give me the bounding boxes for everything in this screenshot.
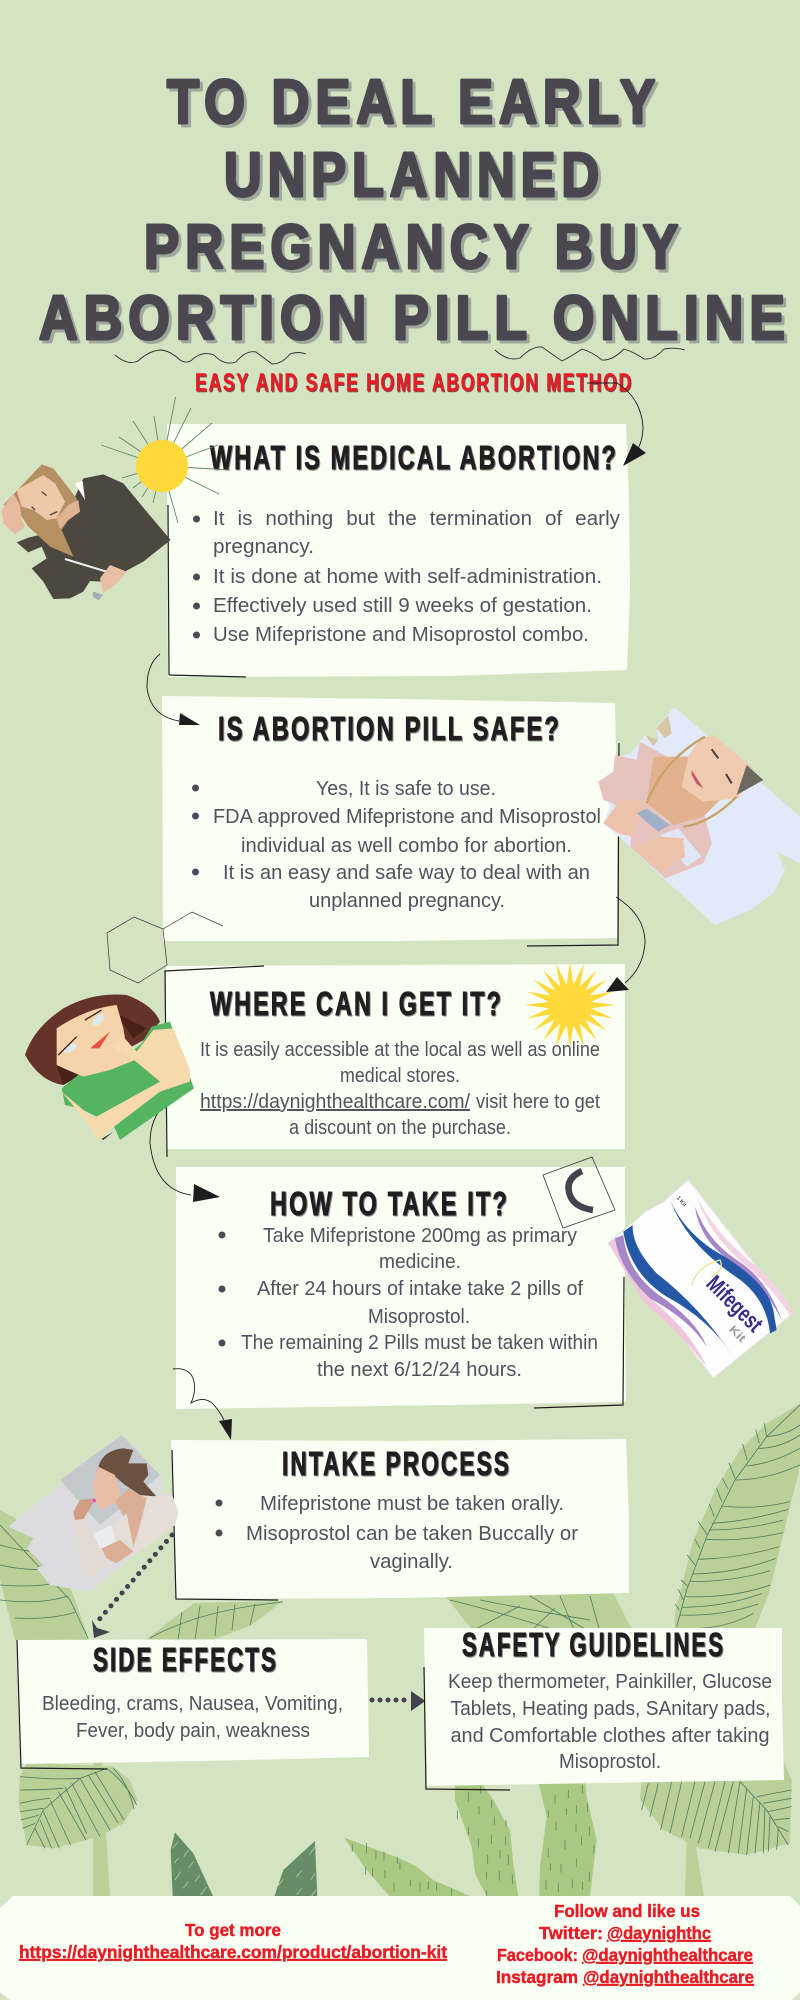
panel: what is medical abortion xyxy=(167,424,630,677)
decorative leaves: bottom dark green pair and mid leaf xyxy=(171,1832,472,1897)
title: UNPLANNED xyxy=(224,141,605,210)
subtitle: EASY AND SAFE HOME ABORTION METHOD xyxy=(195,369,633,397)
arrow: panel three to panel four xyxy=(150,1103,220,1202)
bullet list xyxy=(218,1225,598,1381)
footer: social links: Twitter: xyxy=(539,1923,603,1943)
decorative leaf: middle left xyxy=(145,1601,283,1640)
illustration: thinking cartoon woman xyxy=(25,994,194,1140)
body text: Fever, body pain, weakness xyxy=(76,1720,310,1742)
body text: and Comfortable clothes after taking xyxy=(450,1725,770,1747)
photo: Mifegest kit box: Mifegest xyxy=(701,1270,768,1337)
footer: social links xyxy=(496,1901,754,1987)
photo: woman with pill pack xyxy=(598,707,800,925)
bullet list xyxy=(216,1493,578,1573)
footer: social links: Instagram xyxy=(496,1967,578,1987)
bullet list: Misoprostol. xyxy=(368,1306,470,1328)
bullet list: It is done at home with self-administration. xyxy=(213,566,602,588)
footer: social links: @daynighthealthcare xyxy=(582,1945,753,1965)
body text: visit here to get xyxy=(476,1091,600,1113)
photo: Mifegest kit box xyxy=(608,1179,793,1378)
arrow: dotted to side effects xyxy=(92,1535,172,1638)
body text xyxy=(42,1693,343,1742)
heading: SIDE EFFECTS xyxy=(93,1641,278,1678)
decorative leaf: right tall xyxy=(675,1403,800,1633)
arrowhead over starburst xyxy=(606,977,629,992)
bullet list: the next 6/12/24 hours. xyxy=(317,1359,522,1381)
heading: HOW TO TAKE IT? xyxy=(270,1185,509,1222)
bullet list: Misoprostol can be taken Buccally or xyxy=(246,1523,578,1545)
bullet list: Yes, It is safe to use. xyxy=(316,778,496,800)
bullet list xyxy=(192,778,601,912)
heading: INTAKE PROCESS xyxy=(282,1445,511,1482)
icon: starburst xyxy=(525,962,615,1048)
bullet list: After 24 hours of intake take 2 pills of xyxy=(257,1278,583,1300)
heading: WHERE CAN I GET IT? xyxy=(210,985,503,1022)
footer: get more link: https://daynighthealthcare.com/product/abortion-kit xyxy=(19,1942,447,1962)
bullet list: The remaining 2 Pills must be taken within xyxy=(241,1332,598,1354)
bullet list xyxy=(193,508,620,646)
decorative plant: bottom left round leaf xyxy=(18,1760,137,1896)
body text: Tablets, Heating pads, SAnitary pads, xyxy=(450,1698,770,1720)
photo: Mifegest kit box: Kit xyxy=(726,1324,748,1345)
bullet list: FDA approved Mifepristone and Misoprostol xyxy=(213,806,601,828)
body text: medical stores. xyxy=(340,1065,460,1087)
body text: Keep thermometer, Painkiller, Glucose xyxy=(448,1671,772,1693)
body text: https://daynighthealthcare.com/ xyxy=(200,1091,470,1113)
footer: social links: @daynighthc xyxy=(607,1923,711,1943)
decorative hexagon line art xyxy=(107,912,223,983)
footer: get more link: To get more xyxy=(185,1920,281,1940)
decorative leaf: centre behind panels xyxy=(446,1590,633,1632)
arrow: panel one to panel two xyxy=(147,654,200,725)
bullet list: It is nothing but the termination of early xyxy=(213,508,620,530)
footer: get more link xyxy=(19,1920,447,1962)
bullet list: It is an easy and safe way to deal with an xyxy=(223,862,590,884)
bullet list: individual as well combo for abortion. xyxy=(241,835,572,857)
body text: It is easily accessible at the local as well as online xyxy=(200,1039,600,1061)
panel: how to take it xyxy=(176,1167,626,1409)
icon: sun with rays xyxy=(101,397,230,523)
bullet list: Mifepristone must be taken orally. xyxy=(260,1493,564,1515)
bullet list: medicine. xyxy=(379,1251,461,1273)
title: PREGNANCY BUY xyxy=(144,213,684,282)
title xyxy=(39,68,791,353)
title: TO DEAL EARLY xyxy=(167,68,661,137)
squiggle under title xyxy=(115,347,685,364)
bullet list: Use Mifepristone and Misoprostol combo. xyxy=(213,624,589,646)
decorative plant: stalks and right round leaf xyxy=(455,1760,792,1897)
arrow: dotted to safety guidelines xyxy=(372,1691,424,1711)
footer: social links: Follow and like us xyxy=(554,1901,700,1921)
body text: Bleeding, crams, Nausea, Vomiting, xyxy=(42,1693,343,1715)
body text xyxy=(200,1039,600,1139)
arrow: panel four to panel five xyxy=(173,1369,232,1440)
decorative leaf: left behind photo xyxy=(0,1510,89,1640)
panel: where can I get it xyxy=(165,964,625,1157)
footer: social links: Facebook: xyxy=(497,1945,578,1965)
bullet list: Take Mifepristone 200mg as primary xyxy=(263,1225,577,1247)
bullet list: vaginally. xyxy=(370,1551,453,1573)
body text: a discount on the purchase. xyxy=(289,1117,511,1139)
photo: woman taking a pill xyxy=(8,1434,178,1592)
body text: Misoprostol. xyxy=(559,1751,661,1773)
panel: footer xyxy=(0,1896,800,2000)
arrow: subtitle to panel one xyxy=(587,383,646,466)
heading: IS ABORTION PILL SAFE? xyxy=(218,710,561,747)
panel: intake process xyxy=(171,1439,629,1600)
body text xyxy=(448,1671,772,1773)
bullet list: Effectively used still 9 weeks of gestation. xyxy=(213,595,592,617)
bullet list: unplanned pregnancy. xyxy=(309,890,505,912)
icon: moon card xyxy=(543,1157,615,1228)
photo: woman holding a test xyxy=(2,464,171,600)
footer: social links: @daynighthealthcare xyxy=(583,1967,754,1987)
arrow: panel two to panel three xyxy=(616,897,645,983)
panel: side effects xyxy=(17,1639,369,1769)
heading: WHAT IS MEDICAL ABORTION? xyxy=(210,439,618,476)
panel: is abortion pill safe xyxy=(162,696,619,946)
photo: Mifegest kit box: 1 Kit xyxy=(675,1195,687,1208)
bullet list: pregnancy. xyxy=(213,536,314,558)
panel: safety guidelines xyxy=(424,1626,784,1790)
